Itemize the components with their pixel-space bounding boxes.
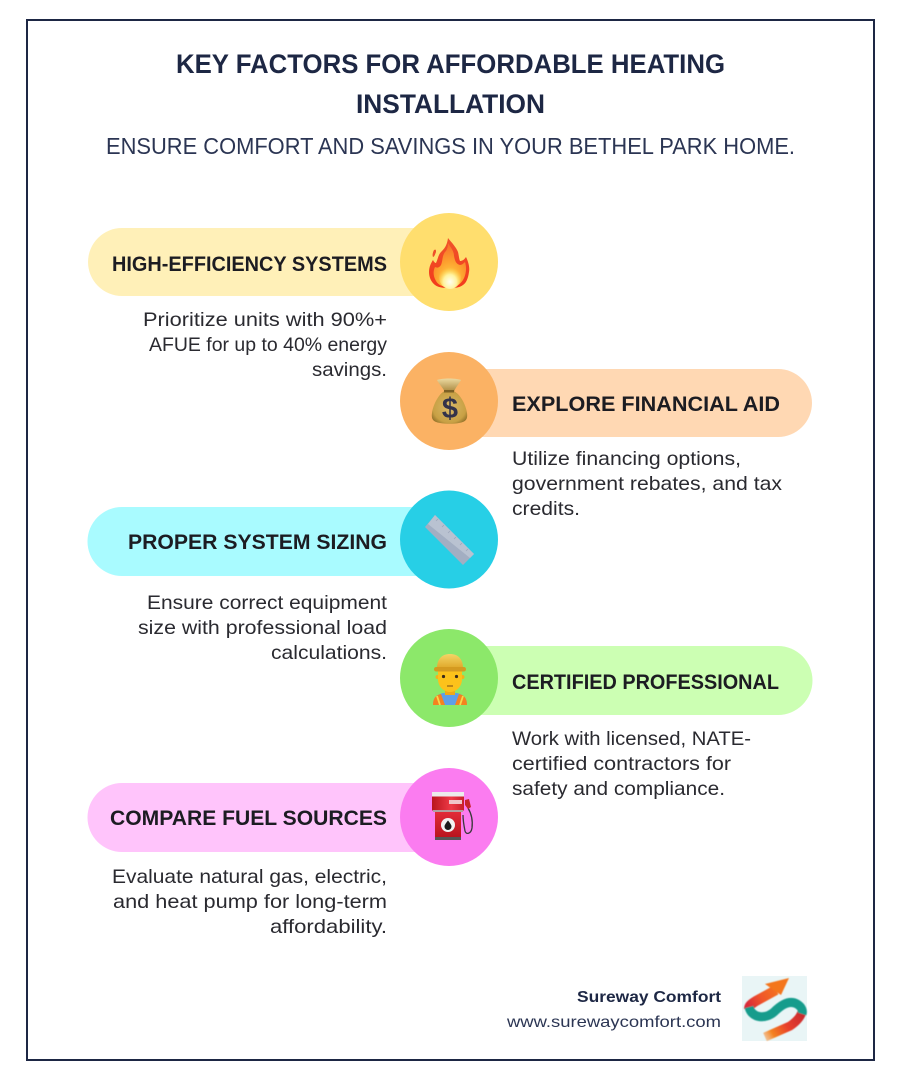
heading: proper system sizing: PROPER SYSTEM SIZING [128, 531, 387, 554]
pill: certified professional [470, 646, 813, 715]
description: proper system sizing [138, 592, 388, 664]
description: explore financial aid [512, 448, 782, 520]
panel: certified professional [400, 629, 813, 800]
heading: certified professional: CERTIFIED PROFESSIONAL [512, 671, 779, 694]
pill: proper system sizing [88, 507, 430, 576]
badge circle: ruler [400, 490, 498, 588]
icon: money bag [432, 378, 467, 425]
description: compare fuel sources: affordability. [270, 916, 387, 938]
description: compare fuel sources: and heat pump for long-term [113, 891, 387, 913]
heading: explore financial aid: EXPLORE FINANCIAL AID [512, 393, 780, 416]
icon: ruler [425, 515, 474, 565]
description: compare fuel sources: Evaluate natural gas, electric, [112, 866, 387, 888]
description: proper system sizing: size with professional load [138, 617, 387, 639]
icon: construction worker [433, 654, 467, 705]
panel: compare fuel sources [88, 768, 498, 938]
icon: fuel pump [432, 792, 472, 840]
description: high-efficiency systems: AFUE for up to 40% energy [149, 334, 387, 356]
icon: fire [429, 238, 469, 289]
pill: explore financial aid [470, 369, 812, 437]
title: KEY FACTORS FOR AFFORDABLE HEATING [176, 49, 725, 79]
panel: high-efficiency systems [88, 213, 498, 381]
description: certified professional: Work with licensed, NATE- [512, 728, 751, 750]
description: compare fuel sources [112, 866, 387, 938]
logo [742, 976, 807, 1041]
description: certified professional [512, 728, 751, 800]
heading: high-efficiency systems: HIGH-EFFICIENCY SYSTEMS [112, 253, 387, 276]
title [176, 49, 725, 119]
footer brand text: www.surewaycomfort.com [506, 1014, 721, 1031]
panel: explore financial aid [400, 352, 812, 520]
icon: money bag: $ [442, 393, 458, 425]
panel: proper system sizing [88, 490, 498, 664]
description: explore financial aid: credits. [512, 498, 580, 520]
description: high-efficiency systems: Prioritize units with 90%+ [143, 309, 387, 331]
pill: high-efficiency systems [88, 228, 430, 296]
description: certified professional: certified contractors for [512, 753, 732, 775]
description: proper system sizing: calculations. [271, 642, 387, 664]
description: high-efficiency systems [143, 309, 387, 381]
badge circle: worker [400, 629, 498, 727]
badge circle: money bag [400, 352, 498, 450]
description: explore financial aid: Utilize financing options, [512, 448, 741, 470]
subtitle: ENSURE COMFORT AND SAVINGS IN YOUR BETHEL PARK HOME. [106, 133, 795, 159]
badge circle: fuel pump [400, 768, 498, 866]
description: explore financial aid: government rebates, and tax [512, 473, 782, 495]
footer brand text: Sureway Comfort [577, 989, 722, 1006]
badge circle: flame [400, 213, 498, 311]
description: high-efficiency systems: savings. [312, 359, 387, 381]
description: certified professional: safety and compliance. [512, 778, 725, 800]
description: proper system sizing: Ensure correct equipment [147, 592, 388, 614]
heading: compare fuel sources: COMPARE FUEL SOURCES [110, 807, 387, 830]
title: INSTALLATION [356, 89, 545, 119]
pill: compare fuel sources [88, 783, 430, 852]
footer brand text [506, 989, 722, 1031]
